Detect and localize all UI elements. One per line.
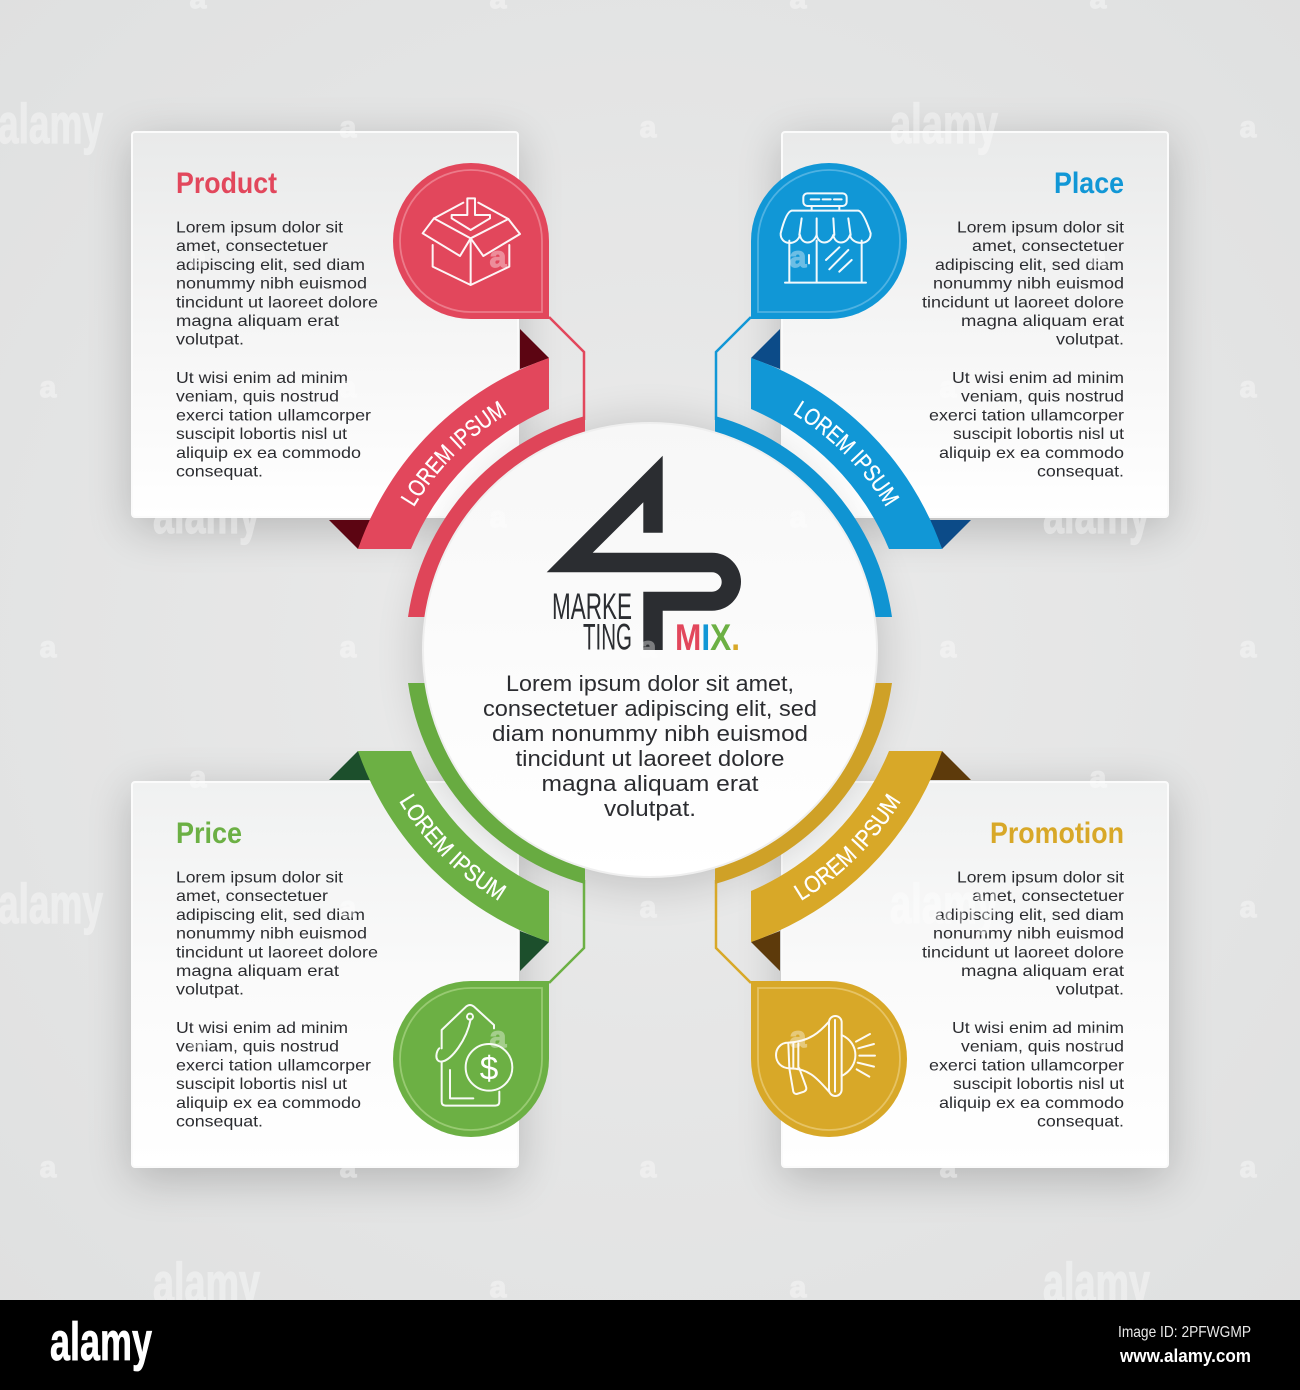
text block: product: amet, consectetuer	[176, 238, 329, 255]
watermarks: alamy	[0, 872, 103, 935]
center text: magna aliquam erat	[542, 771, 758, 796]
text block: promotion: adipiscing elit, sed diam	[935, 907, 1124, 924]
text block: promotion: consequat.	[1037, 1114, 1124, 1130]
panel: price	[132, 782, 518, 1167]
connector and ribbon: product	[329, 317, 585, 617]
watermarks: a	[640, 111, 657, 144]
text block: product: magna aliquam erat	[176, 313, 340, 330]
text block: price: volutpat.	[176, 982, 244, 999]
text block: promotion: suscipit lobortis nisl ut	[953, 1076, 1125, 1093]
text block: product: nonummy nibh euismod	[176, 276, 367, 293]
logo: 4P marketing mix: MARKE	[552, 586, 632, 627]
text block: product: tincidunt ut laoreet dolore	[176, 294, 378, 311]
text block: product: aliquip ex ea commodo	[176, 445, 361, 462]
text block: place: Ut wisi enim ad minim	[952, 370, 1124, 387]
text block: place: veniam, quis nostrud	[961, 389, 1124, 406]
text block: place: exerci tation ullamcorper	[929, 407, 1125, 424]
text block: product	[176, 220, 378, 480]
panel shadows	[131, 140, 1169, 1180]
text block: price: adipiscing elit, sed diam	[176, 907, 365, 924]
watermarks: a	[790, 241, 807, 274]
watermarks: a	[790, 501, 807, 534]
text block: place: consequat.	[1037, 464, 1124, 480]
watermarks: a	[490, 1271, 507, 1304]
watermarks: a	[940, 631, 957, 664]
logo: 4P marketing mix: MIX.	[675, 617, 740, 658]
watermarks: alamy	[153, 1251, 260, 1314]
ribbon label: place: LOREM IPSUM	[794, 400, 900, 506]
watermarks: a	[790, 1021, 807, 1054]
icon: box with arrow	[423, 198, 520, 285]
connector and ribbon: price	[329, 683, 585, 983]
ribbon label: price: LOREM IPSUM	[400, 794, 506, 900]
watermarks: a	[1090, 761, 1107, 794]
watermarks: a	[790, 761, 807, 794]
teardrop: price	[393, 981, 549, 1137]
logo: 4P marketing mix: TING	[583, 616, 632, 658]
watermarks: a	[940, 371, 957, 404]
watermarks: alamy	[0, 92, 103, 155]
teardrop: product	[393, 163, 549, 319]
text block: product: veniam, quis nostrud	[176, 389, 339, 406]
text block: product: adipiscing elit, sed diam	[176, 257, 365, 274]
text block: price: tincidunt ut laoreet dolore	[176, 944, 378, 961]
text block: promotion: veniam, quis nostrud	[961, 1039, 1124, 1056]
text block: price: consequat.	[176, 1114, 263, 1130]
text block: product: exerci tation ullamcorper	[176, 407, 372, 424]
connector and ribbon: place	[715, 317, 971, 617]
watermarks: alamy	[890, 92, 998, 155]
text block: promotion: nonummy nibh euismod	[933, 926, 1124, 943]
text block: price: Lorem ipsum dolor sit	[176, 870, 344, 886]
icon: price tag with dollar	[436, 1005, 512, 1106]
text block: place: suscipit lobortis nisl ut	[953, 426, 1125, 443]
text block: place: magna aliquam erat	[961, 313, 1125, 330]
watermarks: alamy	[1043, 482, 1150, 545]
teardrop: promotion	[751, 981, 907, 1137]
center text	[483, 671, 817, 821]
watermarks: alamy	[153, 482, 260, 545]
watermarks: a	[640, 1151, 657, 1184]
panel: promotion	[782, 782, 1168, 1167]
text block: promotion: aliquip ex ea commodo	[939, 1095, 1124, 1112]
text block: price: nonummy nibh euismod	[176, 926, 367, 943]
watermarks: a	[490, 1021, 507, 1054]
text block: product: Lorem ipsum dolor sit	[176, 220, 344, 236]
watermarks: a	[1090, 1021, 1107, 1054]
center circle	[423, 423, 877, 877]
center text: diam nonummy nibh euismod	[492, 721, 808, 746]
watermarks: a	[790, 1271, 807, 1304]
watermarks: a	[1240, 1151, 1257, 1184]
heading: promotion: Promotion	[990, 817, 1124, 850]
logo: 4P marketing mix	[547, 456, 741, 658]
text block: promotion: magna aliquam erat	[961, 963, 1125, 980]
center text: tincidunt ut laoreet dolore	[516, 746, 784, 771]
center circle shadow	[418, 423, 882, 887]
text block: product: consequat.	[176, 464, 263, 480]
ribbon label: promotion: LOREM IPSUM	[794, 793, 900, 900]
text block: place: tincidunt ut laoreet dolore	[922, 294, 1124, 311]
panel: product	[132, 132, 518, 517]
panel: place	[782, 132, 1168, 517]
text block: promotion: volutpat.	[1056, 982, 1124, 999]
text block: price: suscipit lobortis nisl ut	[176, 1076, 348, 1093]
text block: price: magna aliquam erat	[176, 963, 340, 980]
watermarks: alamy	[1043, 1251, 1150, 1314]
icon: storefront	[781, 193, 871, 283]
footer bar	[0, 1300, 1300, 1390]
text block: promotion: Ut wisi enim ad minim	[952, 1020, 1124, 1037]
connector and ribbon: promotion	[715, 683, 971, 983]
watermarks: a	[40, 631, 57, 664]
watermarks: a	[340, 891, 357, 924]
watermarks: a	[340, 1151, 357, 1184]
watermarks: a	[340, 111, 357, 144]
watermarks: a	[1240, 631, 1257, 664]
text block: place: nonummy nibh euismod	[933, 276, 1124, 293]
text block: price: aliquip ex ea commodo	[176, 1095, 361, 1112]
text block: place: aliquip ex ea commodo	[939, 445, 1124, 462]
text block: price: Ut wisi enim ad minim	[176, 1020, 348, 1037]
text block: promotion: amet, consectetuer	[972, 888, 1125, 905]
text block: place: adipiscing elit, sed diam	[935, 257, 1124, 274]
watermarks: a	[940, 1151, 957, 1184]
website: www.alamy.com	[1119, 1346, 1251, 1366]
image id: Image ID: 2PFWGMP	[1118, 1324, 1251, 1341]
icon: price tag with dollar: $	[480, 1050, 498, 1087]
watermarks: a	[190, 241, 207, 274]
center text: Lorem ipsum dolor sit amet,	[506, 671, 794, 696]
teardrop: place	[751, 163, 907, 319]
watermarks: alamy	[890, 872, 998, 935]
text block: promotion	[922, 870, 1125, 1130]
watermarks: a	[490, 241, 507, 274]
text block: promotion: Lorem ipsum dolor sit	[957, 870, 1125, 886]
center text: volutpat.	[604, 796, 696, 821]
text block: price: exerci tation ullamcorper	[176, 1057, 372, 1074]
text block: place	[922, 220, 1125, 480]
text block: place: amet, consectetuer	[972, 238, 1125, 255]
text block: price: amet, consectetuer	[176, 888, 329, 905]
center text: consectetuer adipiscing elit, sed	[483, 696, 817, 721]
watermarks: a	[40, 1151, 57, 1184]
text block: price	[176, 870, 378, 1130]
watermarks: a	[340, 371, 357, 404]
watermarks: a	[490, 501, 507, 534]
watermarks: a	[190, 1021, 207, 1054]
text block: place: Lorem ipsum dolor sit	[957, 220, 1125, 236]
text block: place: volutpat.	[1056, 332, 1124, 349]
watermarks: a	[190, 761, 207, 794]
watermarks: a	[640, 631, 657, 664]
watermarks: a	[340, 631, 357, 664]
watermarks: a	[1240, 371, 1257, 404]
text block: product: volutpat.	[176, 332, 244, 349]
watermarks: a	[1090, 241, 1107, 274]
heading: price: Price	[176, 817, 242, 850]
heading: product: Product	[176, 167, 277, 200]
icon: megaphone	[776, 1016, 875, 1096]
text block: product: Ut wisi enim ad minim	[176, 370, 348, 387]
heading: place: Place	[1054, 167, 1124, 200]
watermarks: a	[40, 371, 57, 404]
footer logo: alamy	[50, 1312, 152, 1372]
text block: promotion: exerci tation ullamcorper	[929, 1057, 1125, 1074]
text block: promotion: tincidunt ut laoreet dolore	[922, 944, 1124, 961]
text block: product: suscipit lobortis nisl ut	[176, 426, 348, 443]
text block: price: veniam, quis nostrud	[176, 1039, 339, 1056]
watermarks: a	[1240, 111, 1257, 144]
watermarks: a	[640, 891, 657, 924]
watermarks: a	[490, 761, 507, 794]
watermarks: a	[1240, 891, 1257, 924]
ribbon label: product: LOREM IPSUM	[400, 400, 506, 506]
